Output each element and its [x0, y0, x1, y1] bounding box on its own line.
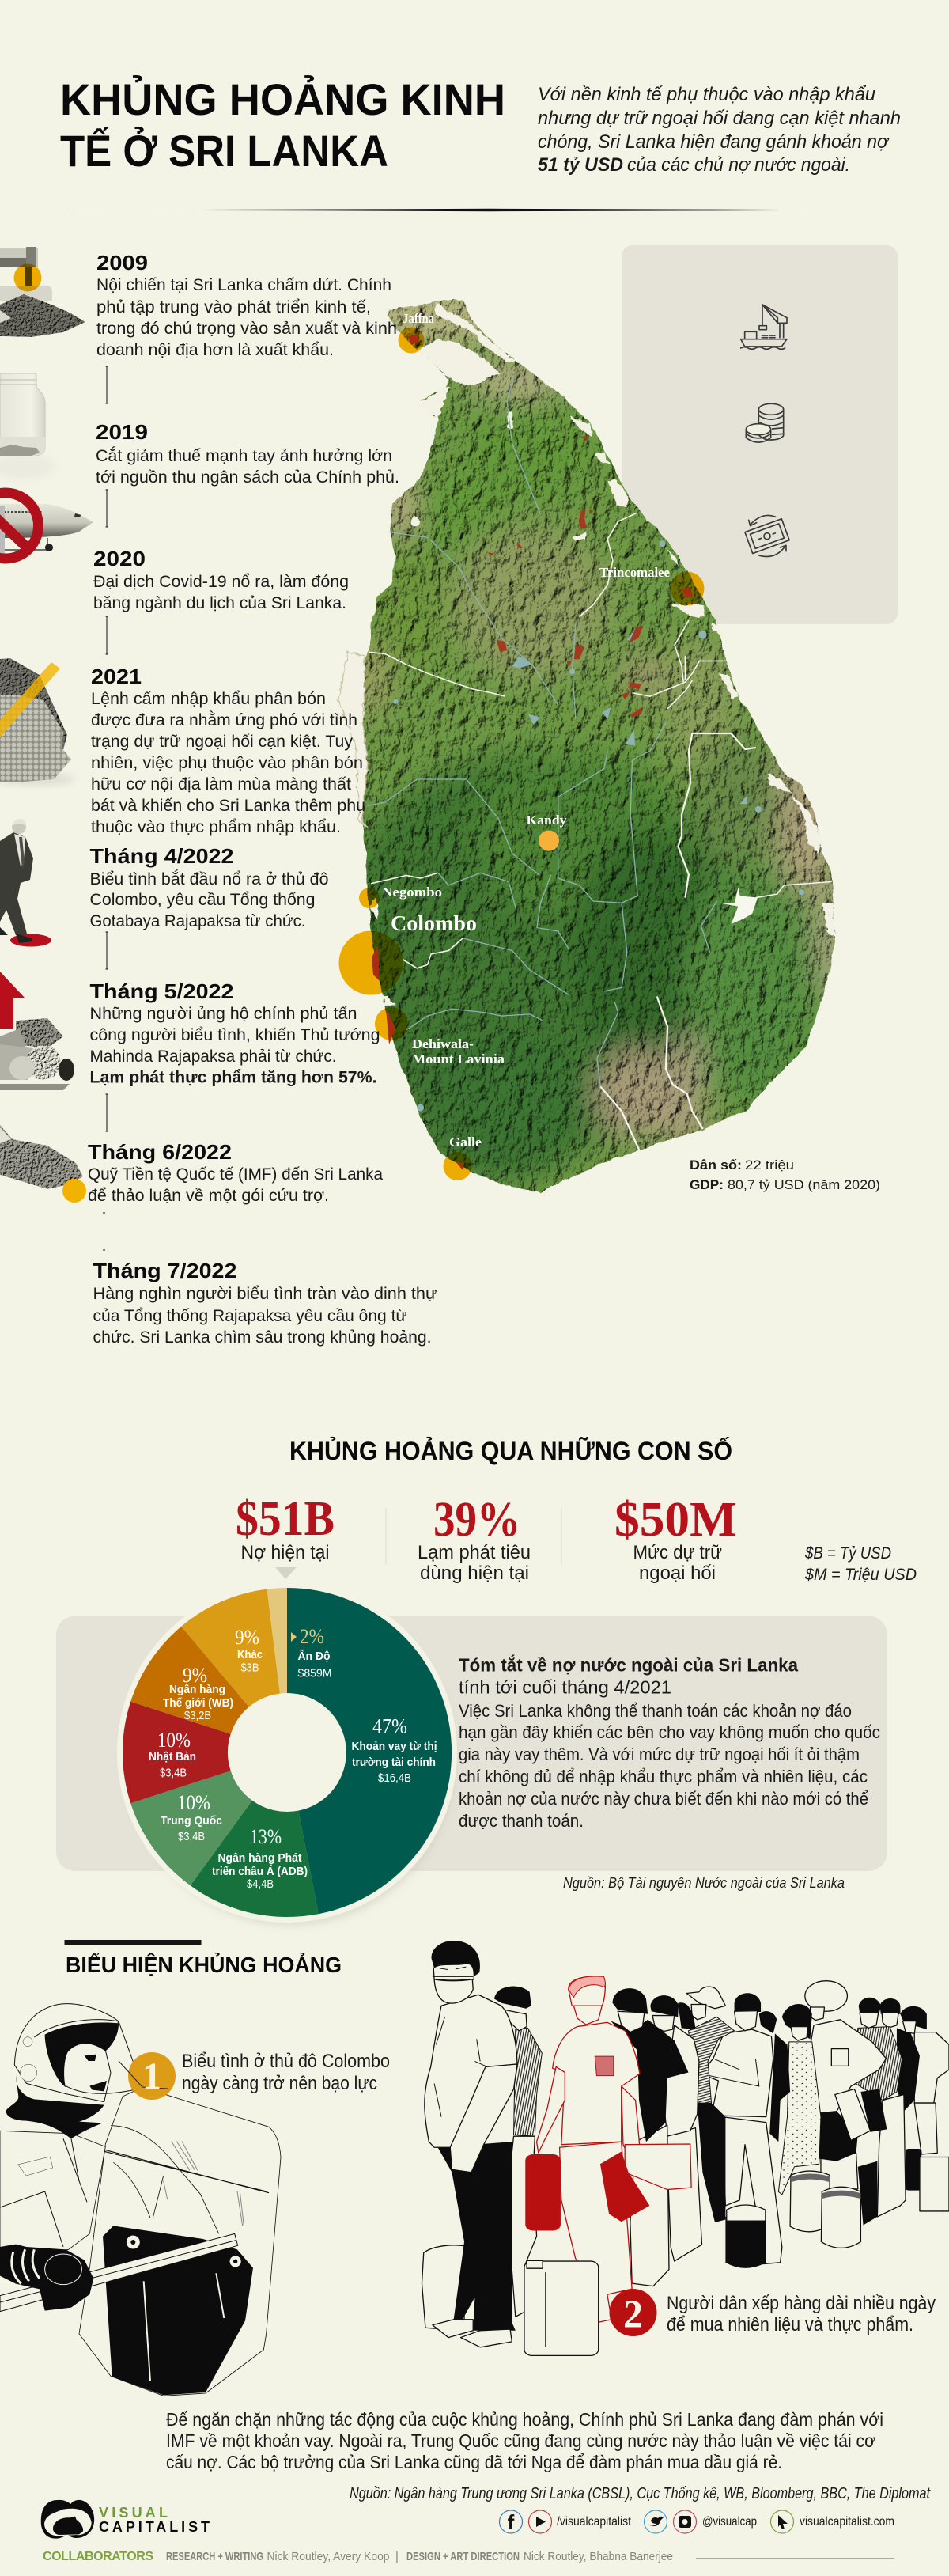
section heading: signs of crisis: BIỂU HIỆN KHỦNG HOẢNG: [66, 1952, 342, 1977]
panel: debt summary: [56, 1616, 887, 1871]
body: [0, 2131, 105, 2255]
2019: 2019: [96, 420, 148, 444]
April 2022: Biểu tình bắt đầu nổ ra ở thủ đô: [90, 870, 329, 888]
person: black shirt: [611, 1988, 689, 2286]
label: World Bank: [163, 1664, 233, 1722]
icon: youtube: [528, 2510, 552, 2533]
stat: inflation: Lạm phát tiêu: [418, 1542, 531, 1563]
city labels: Mount Lavinia: [412, 1051, 505, 1066]
stat: debt: $51B: [236, 1492, 335, 1546]
connector: [106, 1094, 108, 1131]
population and GDP: 22 triệu: [745, 1157, 794, 1172]
image: grounded plane with no sign: [0, 493, 93, 559]
stat: inflation: [418, 1493, 531, 1584]
2020: Đại dịch Covid-19 nổ ra, làm đóng: [93, 573, 349, 591]
social links: @visualcap: [702, 2515, 757, 2529]
connector: [106, 932, 108, 969]
heading: crisis in numbers: KHỦNG HOẢNG QUA NHỮNG CON SỐ: [289, 1437, 732, 1465]
baton: [0, 2233, 238, 2312]
label: China: $3,4B: [178, 1830, 205, 1843]
callout 1: 1: [142, 2055, 161, 2097]
city labels: Trincomalee: [599, 565, 670, 580]
May 2022: [90, 979, 380, 1087]
label: market loans: Khoản vay từ thị: [351, 1740, 437, 1753]
2021: bát và khiến cho Sri Lanka thêm phụ: [91, 797, 365, 815]
logo mark: [41, 2500, 94, 2539]
2019: [96, 420, 399, 487]
shield handle panel: [103, 2226, 253, 2395]
2021: trạng dự trữ ngoại hối cạn kiệt. Tuy: [91, 733, 353, 751]
stat: inflation: 39%: [433, 1493, 520, 1547]
2009: Nội chiến tại Sri Lanka chấm dứt. Chính: [96, 276, 391, 294]
social links: [500, 2510, 894, 2534]
May 2022: Những người ủng hộ chính phủ tấn: [90, 1005, 357, 1023]
yellow coin: [62, 1179, 86, 1203]
label: ADB: triển châu Á (ADB): [212, 1865, 308, 1878]
label: market loans: 47%: [372, 1715, 407, 1737]
2009: [96, 251, 397, 359]
terrain relief: [362, 299, 836, 1193]
label: China: [161, 1791, 222, 1843]
icon: money exchange: [745, 515, 789, 556]
credits: [43, 2550, 894, 2563]
2009: doanh nội địa hơn là xuất khẩu.: [96, 341, 334, 359]
callout 2: [609, 2289, 936, 2336]
shield: [79, 2087, 281, 2396]
barrel: black: [725, 2205, 766, 2268]
July 2022: của Tổng thống Rajapaksa yêu cầu ông từ: [93, 1307, 406, 1325]
city labels: Colombo: [391, 911, 477, 935]
lagoons and coast: [338, 302, 835, 1006]
closing paragraph: cấu nợ. Các bộ trưởng của Sri Lanka cũng đã tới Nga để đàm phán mua dầu giá rẻ.: [166, 2452, 782, 2472]
June 2022: để thảo luận về một gói cứu trợ.: [88, 1187, 329, 1205]
image: politician walking: [0, 819, 51, 946]
July 2022: Hàng nghìn người biểu tình tràn vào dinh thự: [93, 1285, 437, 1303]
illustration: riot police officer: [0, 2004, 281, 2396]
label: India: [291, 1625, 332, 1680]
2020: băng ngành du lịch của Sri Lanka.: [93, 594, 346, 612]
person: middle white shirt: [650, 1995, 702, 2261]
logo: Visual Capitalist: CAPITALIST: [99, 2519, 210, 2535]
person: helmet man: [805, 1981, 887, 2225]
summary text: [459, 1654, 880, 1831]
label: ADB: [212, 1825, 308, 1891]
rivers and roads: [368, 377, 832, 1150]
segment: World Bank: [130, 1627, 249, 1734]
2021: hữu cơ nội địa làm mùa màng thất: [91, 775, 351, 794]
connector: [106, 490, 108, 527]
credits: RESEARCH + WRITING: [166, 2550, 263, 2563]
stat: reserves: Mức dự trữ: [633, 1542, 722, 1563]
visor shadow: [45, 2022, 119, 2087]
label: market loans: [351, 1715, 437, 1785]
summary text: khoản nợ của nước này chưa biết đến khi nào mới có thể: [459, 1789, 868, 1809]
image: sack of fertilizer: [0, 658, 75, 786]
jerry can: front: [524, 2260, 599, 2355]
no sign: [0, 493, 38, 559]
callout 1: [119, 2051, 390, 2100]
credits: COLLABORATORS: [43, 2550, 153, 2563]
logo: Visual Capitalist: VISUAL: [99, 2505, 168, 2521]
person: red highlighted: [525, 1976, 691, 2322]
red jerry cans: [525, 2154, 561, 2230]
icon: coin stacks: [746, 403, 784, 442]
legend: $B = Tỷ USD: [804, 1544, 891, 1563]
person: black shirt right: [880, 1998, 920, 2112]
social links: visualcapitalist.com: [800, 2515, 894, 2529]
timeline: [88, 251, 437, 1347]
label: Japan: Nhật Bản: [149, 1750, 196, 1763]
yellow dot: [14, 264, 41, 291]
barrel: left: [422, 2245, 464, 2329]
donut chart: [117, 1582, 457, 1926]
icon: twitter: [644, 2510, 667, 2533]
callout 1: Biểu tình ở thủ đô Colombo: [182, 2051, 390, 2072]
segment: Japan: [123, 1702, 231, 1803]
legend: $M = Triệu USD: [804, 1566, 917, 1584]
city labels: Galle: [449, 1135, 482, 1150]
stats row: [236, 1492, 917, 1584]
credits: DESIGN + ART DIRECTION: [406, 2550, 520, 2563]
credits: Nick Routley, Bhabna Banerjee: [524, 2550, 673, 2563]
population and GDP: 80,7 tỷ USD (năm 2020): [728, 1177, 880, 1192]
icon: website: [770, 2510, 794, 2533]
June 2022: Tháng 6/2022: [88, 1140, 232, 1164]
image: red arrow and vegetables: [0, 972, 74, 1090]
summary text: Việc Sri Lanka không thể thanh toán các khoản nợ đáo: [459, 1701, 852, 1721]
closing paragraph: IMF về một khoản vay. Ngoài ra, Trung Quốc cũng đang cùng nước này thảo luận về việc tái cơ: [166, 2430, 875, 2451]
population and GDP: GDP:: [690, 1177, 724, 1192]
label: World Bank: 9%: [183, 1664, 207, 1687]
closing paragraph: [166, 2409, 883, 2472]
2021: [91, 665, 365, 836]
connector: [103, 1213, 105, 1250]
reservoir: [719, 887, 758, 924]
city bubbles: [338, 328, 704, 1180]
segment: China: [130, 1771, 252, 1885]
May 2022: công người biểu tình, khiến Thủ tướng: [90, 1026, 380, 1044]
stat: reserves: [614, 1493, 737, 1584]
label: Japan: $3,4B: [160, 1766, 187, 1780]
label: other: 9%: [235, 1626, 259, 1649]
callout 2: để mua nhiên liệu và thực phẩm.: [667, 2314, 913, 2335]
label: Japan: [149, 1729, 196, 1780]
neck scarf: [6, 2075, 104, 2138]
2021: Lệnh cấm nhập khẩu phân bón: [91, 690, 326, 708]
icon: facebook: f: [508, 2510, 515, 2534]
connector: [106, 366, 108, 403]
map of Sri Lanka: [337, 299, 879, 1193]
2009: 2009: [96, 251, 148, 275]
source note: Nguồn: Bộ Tài nguyên Nước ngoài của Sri Lanka: [563, 1875, 845, 1891]
summary text: tính tới cuối tháng 4/2021: [459, 1677, 671, 1698]
person: crossed arms: [701, 1993, 790, 2264]
barrels: [790, 2171, 860, 2248]
credits: |: [395, 2550, 399, 2563]
April 2022: Tháng 4/2022: [90, 844, 234, 868]
person: woman in dress: [778, 2004, 821, 2195]
connector: [106, 616, 108, 654]
stat: reserves: ngoại hối: [639, 1563, 716, 1584]
person: striped shirt: [851, 1998, 906, 2217]
person: behind front man: [494, 1986, 542, 2317]
credits: Nick Routley, Avery Koop: [267, 2550, 389, 2563]
label: World Bank: $3,2B: [184, 1709, 211, 1722]
label: India: 2%: [300, 1625, 324, 1648]
stat: debt: Nợ hiện tại: [240, 1542, 329, 1563]
title: [60, 74, 505, 176]
image: glass jar with coins: [0, 373, 55, 479]
label: India: Ấn Độ: [297, 1650, 331, 1663]
social links: /visualcapitalist: [557, 2515, 631, 2529]
image: sewing machine and tea leaves: [0, 247, 85, 337]
pointer: [275, 1567, 297, 1579]
title: KHỦNG HOẢNG KINH: [60, 74, 505, 124]
label: other: $3B: [240, 1661, 259, 1674]
summary text: được thanh toán.: [459, 1811, 584, 1831]
intro text: 51 tỷ USD: [538, 154, 623, 176]
stat: inflation: dùng hiện tại: [420, 1563, 529, 1584]
label: World Bank: Ngân hàng: [169, 1683, 225, 1696]
label: World Bank: Thế giới (WB): [163, 1696, 233, 1710]
2019: Cắt giảm thuế mạnh tay ảnh hưởng lớn: [96, 447, 392, 465]
summary text: Tóm tắt về nợ nước ngoài của Sri Lanka: [459, 1654, 798, 1676]
callout 2: 2: [623, 2291, 643, 2335]
July 2022: [93, 1259, 437, 1347]
summary text: gia này vay thêm. Và với mức dự trữ ngoại hối ít ỏi thậm: [459, 1744, 860, 1764]
April 2022: Gotabaya Rajapaksa từ chức.: [90, 912, 305, 930]
title: TẾ Ở SRI LANKA: [60, 126, 388, 176]
segment: India: [267, 1588, 287, 1694]
May 2022: Lạm phát thực phẩm tăng hơn 57%.: [90, 1068, 376, 1087]
label: market loans: trường tài chính: [352, 1756, 436, 1769]
section heading: signs of crisis: [65, 1940, 342, 1977]
April 2022: Colombo, yêu cầu Tổng thống: [90, 891, 315, 909]
population and GDP: Dân số:: [690, 1157, 742, 1172]
summary text: hạn gần đây khiến các bên cho vay không muốn cho quốc: [459, 1722, 880, 1742]
image: hand with coin: [0, 1125, 86, 1203]
city labels: Kandy: [527, 813, 567, 828]
intro text: Với nền kinh tế phụ thuộc vào nhập khẩu: [538, 84, 875, 105]
person: far right: [900, 2006, 949, 2211]
icon: instagram: [674, 2510, 696, 2533]
face details: [85, 2055, 107, 2091]
icon: facebook: [500, 2510, 522, 2534]
segment: other: [181, 1589, 280, 1707]
illustration: queue of people: [422, 1941, 949, 2355]
label: ADB: 13%: [250, 1825, 282, 1848]
2021: thuộc vào thực phẩm nhập khẩu.: [91, 818, 341, 836]
city labels: [382, 311, 670, 1150]
June 2022: Quỹ Tiền tệ Quốc tế (IMF) đến Sri Lanka: [88, 1165, 383, 1184]
city labels: Jaffna: [403, 311, 434, 326]
July 2022: chức. Sri Lanka chìm sâu trong khủng hoảng.: [93, 1328, 432, 1347]
stat: reserves: $50M: [614, 1493, 737, 1547]
segment: market loans: [287, 1588, 452, 1914]
helmet: [14, 2004, 119, 2102]
intro text: chóng, Sri Lanka hiện đang gánh khoản nợ: [538, 131, 890, 153]
icon: cargo ship with crane: [741, 305, 787, 349]
label: market loans: $16,4B: [378, 1771, 411, 1785]
May 2022: Mahinda Rajapaksa phải từ chức.: [90, 1047, 337, 1066]
intro text: nhưng dự trữ ngoại hối đang cạn kiệt nhanh: [538, 108, 901, 129]
2009: trong đó chú trọng vào sản xuất và kinh: [96, 320, 397, 338]
intro text: của các chủ nợ nước ngoài.: [627, 154, 850, 176]
label: India: $859M: [297, 1666, 332, 1680]
label: ADB: $4,4B: [247, 1877, 274, 1891]
May 2022: Tháng 5/2022: [90, 979, 234, 1003]
2009: phủ tập trung vào phát triển kinh tế,: [96, 298, 371, 316]
person: hat: [686, 1987, 735, 2222]
logo: Visual Capitalist: [41, 2500, 210, 2539]
2020: 2020: [93, 547, 146, 570]
label: other: [235, 1626, 263, 1674]
panel: icons: [622, 245, 898, 624]
April 2022: [90, 844, 329, 930]
2019: tới nguồn thu ngân sách của Chính phủ.: [96, 468, 399, 487]
callout 1: ngày càng trở nên bạo lực: [182, 2073, 377, 2094]
segment: ADB: [191, 1801, 319, 1917]
city labels: Dehiwala-: [412, 1036, 474, 1051]
summary text: chí không đủ để nhập khẩu thực phẩm và nhiên liệu, các: [459, 1767, 868, 1786]
city labels: Negombo: [382, 885, 442, 900]
label: other: Khác: [237, 1648, 263, 1661]
2021: nhiên, việc phụ thuộc vào phân bón: [91, 754, 363, 772]
2021: 2021: [91, 665, 142, 688]
glove: [0, 2245, 93, 2311]
label: Japan: 10%: [157, 1729, 191, 1752]
legend: [804, 1544, 917, 1584]
label: ADB: Ngân hàng Phát: [218, 1851, 302, 1865]
June 2022: [88, 1140, 383, 1205]
label: China: Trung Quốc: [161, 1814, 222, 1828]
2021: được đưa ra nhằm ứng phó với tình: [91, 711, 357, 729]
2020: [93, 547, 349, 612]
population and GDP: [690, 1157, 880, 1192]
label: China: 10%: [177, 1791, 210, 1814]
closing paragraph: Để ngăn chặn những tác động của cuộc khủng hoảng, Chính phủ Sri Lanka đang đàm phán với: [166, 2409, 883, 2430]
intro text: [538, 84, 901, 176]
July 2022: Tháng 7/2022: [93, 1259, 237, 1282]
person: front man: [425, 1941, 517, 2347]
